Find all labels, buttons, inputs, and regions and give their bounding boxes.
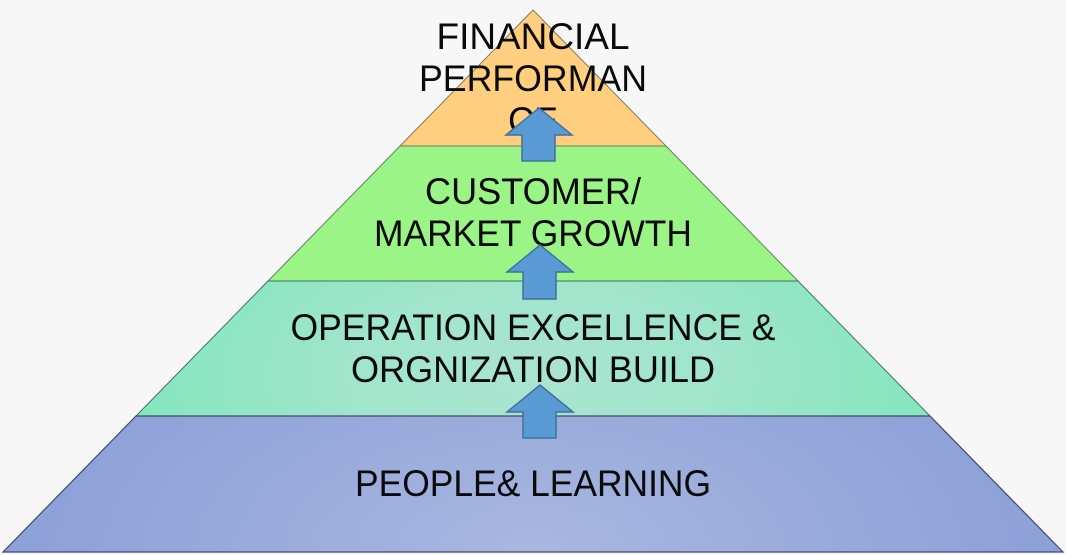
layer: operation excellence: OPERATION EXCELLENCE &	[290, 307, 776, 348]
arrow: middle	[507, 245, 573, 299]
layer: customer market growth	[268, 146, 798, 281]
layer: customer market growth: CUSTOMER/	[425, 171, 642, 212]
layer: financial performance	[400, 10, 666, 146]
layer: people and learning	[3, 416, 1063, 552]
layer: financial performance: PERFORMAN	[419, 58, 647, 99]
layer: people and learning: PEOPLE& LEARNING	[355, 463, 711, 504]
layer: operation excellence	[136, 281, 930, 416]
layer: customer market growth: MARKET GROWTH	[374, 213, 692, 254]
layer: financial performance: CE	[508, 100, 558, 141]
arrow: top	[506, 108, 572, 161]
arrow: bottom	[507, 385, 573, 438]
layer: financial performance: FINANCIAL	[436, 16, 630, 57]
layer: operation excellence: ORGNIZATION BUILD	[351, 349, 715, 390]
